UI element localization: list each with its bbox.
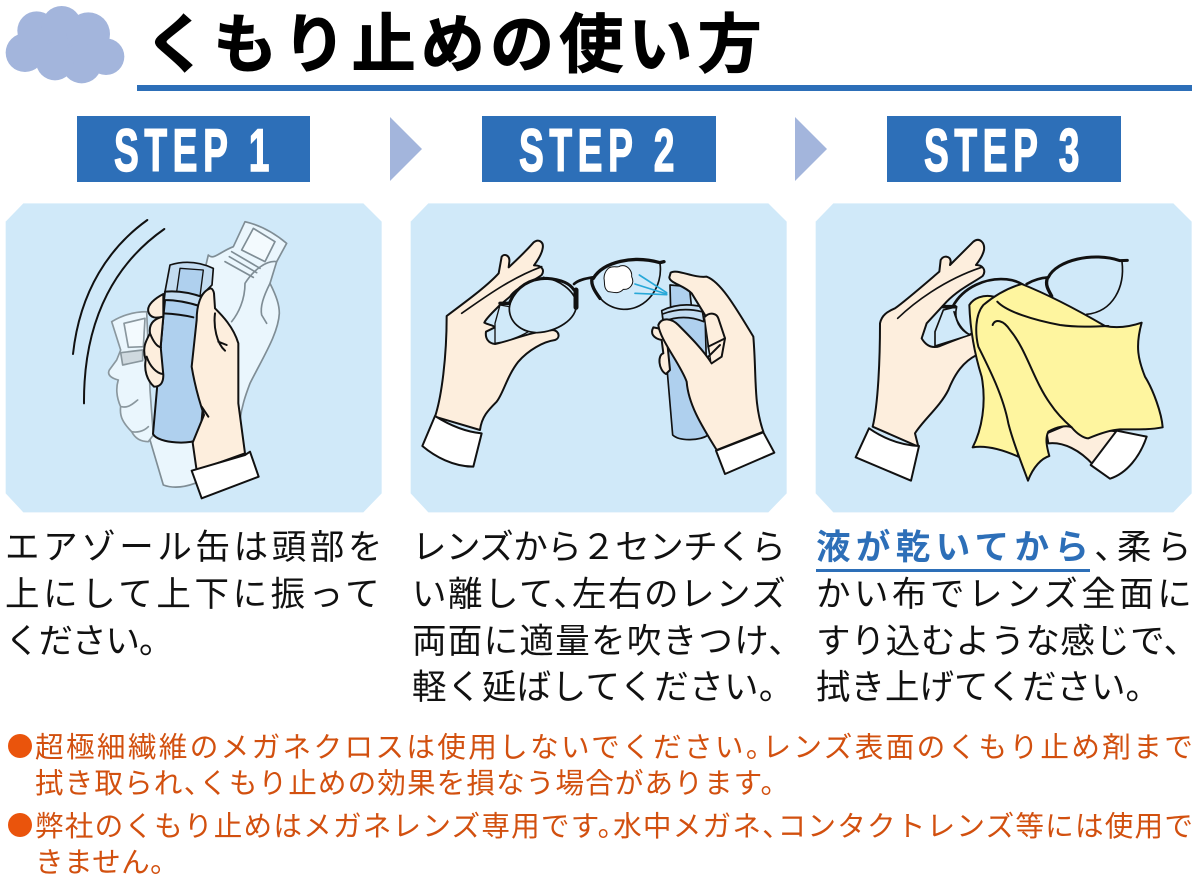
step 2 badge [482, 116, 716, 184]
step 2 badge: STEP 2 [519, 117, 680, 184]
notes [8, 732, 1195, 879]
hand [873, 240, 984, 447]
right hand [652, 272, 763, 450]
text: step 1 description: ください。 [5, 623, 155, 661]
text: step 2 description: い離して、左右のレンズ [412, 576, 787, 614]
cuff [856, 428, 919, 481]
other cuff [1091, 431, 1147, 479]
icon: cloud [6, 6, 124, 84]
text: step 2 description: 軽く延ばしてください。 [412, 669, 777, 707]
fog patch [604, 266, 633, 293]
panel: step 3 illustration [816, 203, 1192, 512]
panel: step 1 illustration [6, 203, 382, 512]
text: step 2 description: 両面に適量を吹きつけ、 [412, 623, 787, 661]
notes: 弊社のくもり止めはメガネレンズ専用です。水中メガネ、コンタクトレンズ等には使用で [35, 811, 1194, 843]
text: step 3 description: かい布でレンズ全面に [816, 576, 1195, 614]
text: step 3 description [816, 528, 1197, 707]
title: くもり止めの使い方 [144, 9, 767, 81]
text: step 1 description: エアゾール缶は頭部を [5, 529, 386, 567]
ghost upper hand and can [150, 222, 287, 487]
step 1 badge: STEP 1 [114, 117, 275, 184]
text: step 2 description: レンズから２センチくら [412, 529, 785, 567]
step 3 badge [887, 116, 1121, 184]
arrow 2 [795, 117, 827, 181]
arrow 1 [390, 117, 422, 181]
text: step 3 description: すり込むような感じで、 [816, 623, 1181, 661]
step 3 badge: STEP 3 [924, 117, 1085, 184]
notes: きません。 [35, 847, 165, 879]
spray can [662, 285, 708, 440]
left cuff [422, 416, 482, 467]
text: step 3 description: 液が乾いてから、柔ら [816, 529, 1197, 567]
left hand [435, 241, 559, 430]
motion lines [73, 220, 164, 403]
ghost lower hand and can [109, 312, 153, 442]
main can [153, 262, 213, 443]
cloth [969, 284, 1163, 481]
spray lines [635, 275, 667, 295]
right cuff [716, 432, 774, 474]
text: step 1 description [5, 529, 386, 661]
text: step 2 description [412, 529, 787, 707]
other hand [1047, 425, 1118, 465]
text: step 1 description: 上にして上下に振って [5, 576, 383, 614]
step 1 badge [77, 116, 310, 184]
notes: 拭き取られ、くもり止めの効果を損なう場合があります。 [35, 768, 776, 800]
glasses [500, 260, 664, 333]
main hand [144, 288, 245, 471]
main cuff [192, 452, 259, 498]
title rule [137, 85, 1192, 91]
text: step 3 description: 拭き上げてください。 [816, 669, 1143, 707]
glasses [943, 257, 1127, 335]
panel: step 2 illustration [410, 203, 787, 512]
notes: 超極細繊維のメガネクロスは使用しないでください。レンズ表面のくもり止め剤まで [35, 732, 1195, 764]
